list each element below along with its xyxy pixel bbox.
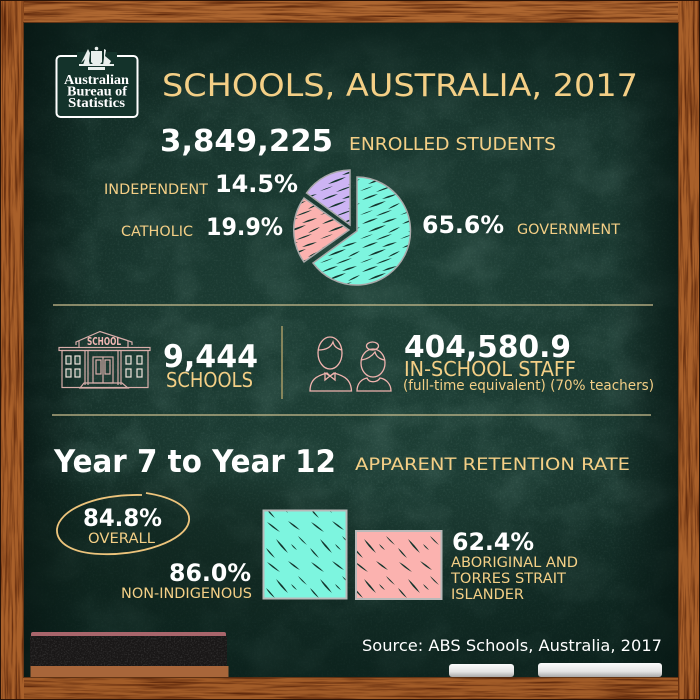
logo wordmark <box>64 73 129 111</box>
icon: school building: SCHOOL <box>87 335 121 348</box>
schools figure: SCHOOLS <box>166 368 253 392</box>
logo: Australian Bureau of Statistics <box>56 47 138 117</box>
label: independent: 14.5% <box>215 170 298 198</box>
label: non-Indigenous: 86.0% <box>169 559 251 587</box>
label: Catholic <box>121 213 283 241</box>
label: government: 65.6% <box>422 211 504 239</box>
eraser <box>30 632 228 677</box>
in-school staff figure <box>403 330 654 394</box>
label: government <box>422 211 620 239</box>
heading: Year 7 to Year 12 <box>53 444 630 480</box>
icon: coat of arms <box>77 47 117 70</box>
slice: Catholic 19.9% <box>293 197 350 263</box>
logo wordmark: Statistics <box>68 96 126 111</box>
icon: school building <box>59 332 150 388</box>
label: Aboriginal and Torres Strait Islander: 62.4% <box>452 528 534 556</box>
pie chart: enrolment by sector <box>290 168 415 288</box>
logo wordmark: Bureau of <box>67 84 127 100</box>
title: SCHOOLS, AUSTRALIA, 2017 <box>162 68 638 104</box>
schools figure <box>163 339 258 392</box>
label: Aboriginal and Torres Strait Islander <box>450 528 578 603</box>
schools figure: 9,444 <box>163 339 258 375</box>
callout: overall retention: OVERALL <box>88 531 155 547</box>
bar: Aboriginal and Torres Strait Islander 62.4% <box>356 531 442 599</box>
in-school staff figure: (full-time equivalent) (70% teachers) <box>403 378 654 394</box>
enrolled students figure <box>160 124 556 159</box>
bar: non-Indigenous 86.0% <box>264 510 346 598</box>
in-school staff figure: IN-SCHOOL STAFF <box>404 357 576 381</box>
heading: Year 7 to Year 12: APPARENT RETENTION RATE <box>355 455 630 475</box>
label: Aboriginal and Torres Strait Islander: TORRES STRAIT <box>450 571 566 587</box>
label: Aboriginal and Torres Strait Islander: ABORIGINAL AND <box>451 555 578 571</box>
label: Catholic: CATHOLIC <box>121 224 193 240</box>
callout: overall retention: 84.8% <box>83 504 162 532</box>
label: government: GOVERNMENT <box>517 222 620 238</box>
icon: male staff <box>310 337 352 391</box>
label: independent: INDEPENDENT <box>104 182 208 198</box>
heading: Year 7 to Year 12: Year 7 to Year 12 <box>53 444 336 480</box>
enrolled students figure: ENROLLED STUDENTS <box>349 134 556 155</box>
label: non-Indigenous <box>121 559 252 602</box>
logo wordmark: Australian <box>64 73 129 88</box>
in-school staff figure: 404,580.9 <box>404 330 571 365</box>
callout: overall retention <box>57 493 189 554</box>
enrolled students figure: 3,849,225 <box>160 124 333 159</box>
label: Catholic: 19.9% <box>206 213 283 241</box>
slice: independent 14.5% <box>304 168 352 228</box>
label: Aboriginal and Torres Strait Islander: ISLANDER <box>451 587 524 603</box>
slice: government 65.6% <box>312 176 412 286</box>
chalk sticks <box>449 663 662 677</box>
label: non-Indigenous: NON-INDIGENOUS <box>121 586 252 602</box>
icon: female staff <box>357 342 391 391</box>
source note: Source: ABS Schools, Australia, 2017 <box>362 636 662 655</box>
label: independent <box>104 170 298 198</box>
